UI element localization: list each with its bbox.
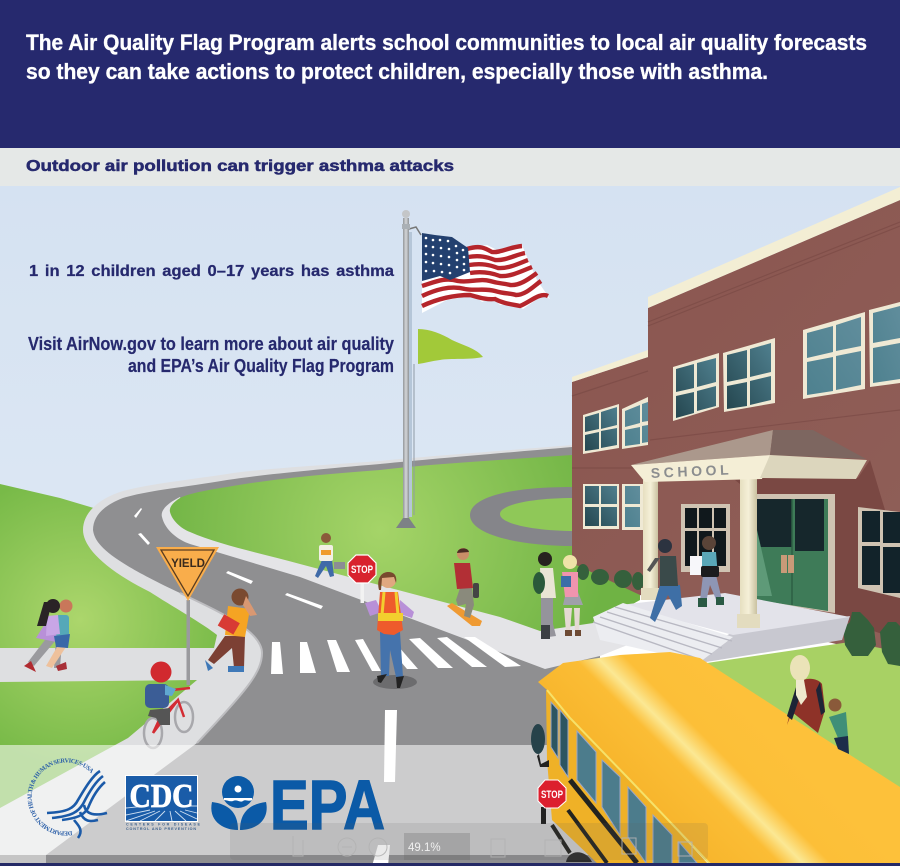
bus mirror [531,724,549,767]
entrance steps [593,603,733,662]
icon: green air quality flag [418,329,483,364]
heading [26,30,867,84]
sign: bus stop arm [538,780,566,824]
window: left wing upper 2 [622,397,648,449]
logo: CDC: CENTERS FOR DISEASE [126,822,201,826]
canopy shadow on wall [690,460,900,640]
logo: CDC: CDC [130,778,194,815]
window: left wing lower 2 [622,484,648,530]
window: upper main 4 [869,302,900,387]
window: upper main 2 [723,338,775,412]
bus windows [551,702,697,866]
text: asthma statistic: 1 in 12 children aged 0–17 years has asthma [29,263,394,280]
panel: sky background [0,186,900,586]
heading: The Air Quality Flag Program alerts school communities to local air quality forecasts [26,30,867,55]
person: adult and child by the bus [787,655,849,754]
grass: school lawn [170,453,640,631]
logo: CDC [126,776,201,831]
pdf viewer toolbar [230,823,708,860]
text: call to action [28,334,394,376]
panel: subheading band [0,148,900,186]
school sign text: SCHOOL [650,461,733,481]
driveway loop [470,487,574,546]
window: entrance left [681,504,730,572]
crosswalk [271,637,521,674]
child: boy on steps [647,539,682,622]
wall course lines [572,222,900,468]
road [46,447,600,866]
crossing guard [365,572,417,689]
text: call to action: Visit AirNow.gov to learn more about air quality [28,334,394,354]
porch side [700,616,850,663]
window: entrance right [858,507,900,598]
road markings [134,508,397,866]
logo: EPA [211,766,385,844]
sign: crossing guard stop paddle: STOP [351,564,373,576]
column: right [737,478,760,628]
sign: bus stop arm: STOP [541,789,563,801]
driveway island grass [500,498,574,531]
window: upper main 1 [673,353,719,421]
window: left wing lower 1 [583,484,619,529]
child: cyclist [144,662,193,748]
grass: left hill [0,484,240,866]
sidewalk: along school grounds [162,497,640,669]
panel: subheading band: Outdoor air pollution can trigger asthma attacks [26,158,454,175]
sign: crossing guard stop paddle [348,555,376,603]
child: boy near far curb [315,533,345,578]
canopy roof [631,430,866,465]
column: left [641,480,660,600]
heading: so they can take actions to protect children, especially those with asthma. [26,59,768,84]
bushes [577,564,900,666]
curb: road edge [180,593,262,743]
school building wall [572,200,900,660]
footer rule [0,863,900,866]
icon: American flag [422,233,550,313]
window: left wing upper 1 [583,404,619,454]
porch deck [620,593,850,635]
logo: HHS: DEPARTMENT OF HEALTH & HUMAN SERVICES·USA [28,758,93,836]
translucent logo band [0,745,600,855]
sign: yield: YIELD [171,558,205,570]
panel: header [0,0,900,148]
window: upper main 3 [803,312,865,399]
child: girl on steps [690,536,724,607]
flagpole [396,210,421,528]
roof trim: left wing [572,350,648,382]
child: girl with backpack [533,552,556,639]
child: skateboarder [447,548,482,626]
canopy fascia [631,455,867,482]
grey strip below band [0,855,46,863]
sidewalk: left side [0,445,572,866]
text: call to action: and EPA’s Air Quality Flag Program [128,356,394,376]
school doors [752,494,835,613]
child: boy with orange shirt [205,588,257,672]
logo: CDC: CONTROL AND PREVENTION [126,827,196,831]
school bus [538,652,900,866]
child: girls walking [24,599,72,672]
roof trim: main wing [648,187,900,308]
pdf viewer toolbar: 49.1% [408,842,441,854]
grass beside porch [700,642,900,790]
child: blonde girl [561,555,583,636]
sign: yield [156,547,219,685]
logo: EPA: EPA [270,766,385,844]
